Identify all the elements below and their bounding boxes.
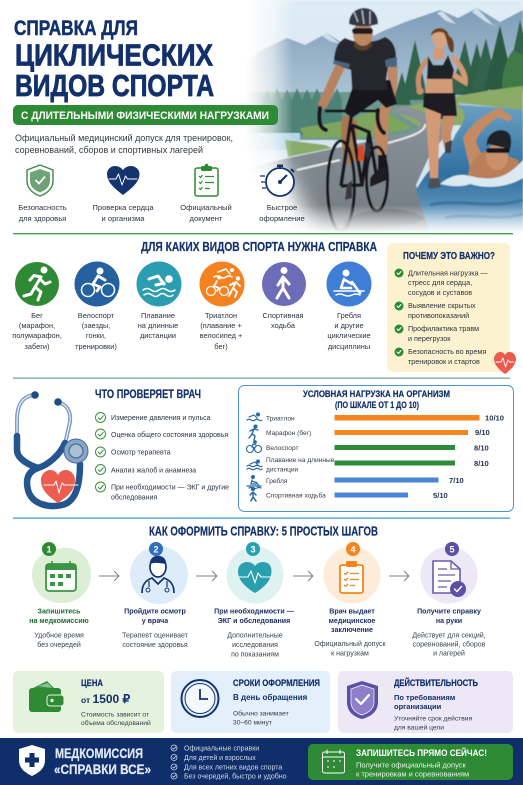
title: ЦИКЛИЧЕСКИХ	[15, 38, 213, 72]
step 4: conclusion: Врач выдает	[329, 608, 375, 616]
intro text: Официальный медицинский допуск для тренировок,	[15, 133, 233, 143]
step 4: conclusion: к нагрузкам	[331, 650, 369, 658]
step 3: ECG: При необходимости —	[214, 608, 295, 616]
step 4: conclusion: Официальный допуск	[314, 640, 387, 648]
sport: cycling: гонки,	[86, 331, 106, 340]
green subtitle banner	[13, 105, 278, 125]
step 3: ECG: по показаниям	[231, 652, 279, 658]
bar chart: conditional load: (ПО ШКАЛЕ ОТ 1 ДО 10)	[335, 400, 419, 410]
card: price: Стоимость зависит от	[81, 712, 149, 718]
step 1: sign up: 1	[46, 544, 52, 554]
panel: why it matters: Выявление скрытых	[408, 301, 476, 310]
bar chart: conditional load: УСЛОВНАЯ НАГРУЗКА НА ОРГАНИЗМ	[303, 389, 450, 400]
benefit: stopwatch: оформление	[259, 214, 305, 223]
benefit: safety: Безопасность	[18, 203, 67, 212]
card: validity: для вашей цели	[394, 724, 444, 732]
sport: rowing	[326, 262, 372, 351]
panel: why it matters: стресс для сердца,	[408, 278, 472, 287]
step 5: receive certificate: 5	[449, 544, 455, 554]
sport: rowing: Гребля	[337, 311, 361, 320]
sport: triathlon: Триатлон	[205, 311, 237, 320]
step 5: receive certificate: Действует для секций,	[412, 632, 486, 640]
sport: swimming: дистанции	[140, 331, 176, 340]
step 2: doctor: Пройдите осмотр	[124, 608, 187, 616]
sport: race walking: ходьба	[271, 321, 296, 330]
step 1: sign up	[29, 542, 91, 649]
left fade	[225, 0, 292, 181]
card: validity: По требованиям	[394, 693, 456, 702]
card: price: ЦЕНА	[81, 678, 103, 688]
panel: why it matters: ПОЧЕМУ ЭТО ВАЖНО?	[403, 251, 495, 262]
step 3: ECG: 3	[250, 544, 256, 554]
sport: triathlon: бег)	[214, 342, 228, 351]
green subtitle banner: С ДЛИТЕЛЬНЫМИ ФИЗИЧЕСКИМИ НАГРУЗКАМИ	[21, 110, 269, 122]
benefit: official document	[180, 164, 232, 223]
step 3: ECG	[214, 542, 295, 658]
card: price: объема обследований	[81, 719, 151, 727]
bar chart: conditional load: Триатлон	[266, 416, 295, 422]
benefit: stopwatch: Быстрое	[267, 203, 297, 212]
step 4: conclusion: 4	[350, 544, 356, 554]
doctor checklist: Измерение давления и пульса	[111, 415, 211, 422]
call to action: Получите официальный допуск	[356, 760, 467, 770]
grass	[395, 86, 523, 127]
sport: race walking: Спортивная	[262, 311, 304, 320]
hero photo: cyclist, runner and swimmer on a mountain road	[249, 0, 523, 232]
panel: why it matters: сосудов и суставов	[408, 288, 472, 297]
sport: cycling: тренировки)	[75, 342, 117, 351]
step 1: sign up: без очередей	[37, 641, 81, 649]
step 5: receive certificate: на руки	[436, 617, 462, 625]
benefit: heart check	[92, 166, 154, 223]
step 1: sign up: Удобное время	[34, 632, 84, 640]
sport: rowing: циклические	[327, 331, 371, 340]
step 3: ECG: исследования	[232, 642, 278, 649]
bar chart: conditional load: Велоспорт	[266, 445, 299, 452]
card: price	[13, 671, 164, 733]
step 5: receive certificate: соревнований, сборов	[413, 640, 486, 648]
sport: cycling: Велоспорт	[78, 311, 115, 320]
chart sport icons	[246, 413, 262, 501]
card: validity: Уточняйте срок действия	[394, 714, 473, 722]
card: processing time: СРОКИ ОФОРМЛЕНИЯ	[233, 678, 320, 689]
sport: triathlon: (плавание +	[200, 321, 242, 330]
doctor checklist: Анализ жалоб и анамнеза	[111, 466, 196, 474]
footer list	[171, 745, 287, 780]
bottom fade	[278, 206, 523, 233]
benefit: heart check: Проверка сердца	[92, 203, 154, 212]
step 2: doctor	[122, 542, 189, 649]
benefit: safety	[18, 165, 67, 223]
footer list: Без очередей, быстро и удобно	[184, 772, 287, 780]
card: validity	[338, 671, 513, 733]
doctor checklist: При необходимости — ЭКГ и другие	[111, 484, 229, 492]
step 2: doctor: состояние здоровья	[122, 642, 188, 649]
call to action	[308, 744, 513, 780]
sport: swimming: на длинные	[138, 321, 178, 330]
step 3: ECG: Дополнительные	[227, 632, 283, 640]
card: processing time: 30–60 минут	[233, 720, 272, 726]
intro text	[15, 133, 233, 155]
step 4: conclusion: заключение	[331, 626, 373, 634]
arrow	[99, 571, 119, 581]
sport: race walking	[262, 262, 306, 330]
bar chart: conditional load: 5/10	[433, 491, 448, 500]
panel: why it matters: Безопасность во время	[408, 347, 486, 356]
card: processing time	[171, 671, 330, 733]
bar chart: conditional load	[238, 386, 514, 512]
arrow	[196, 571, 217, 581]
runner	[416, 28, 465, 189]
step 2: doctor: у врача	[142, 617, 168, 625]
step 2: doctor: 2	[153, 544, 159, 554]
card: processing time: В день обращения	[233, 693, 308, 702]
water	[416, 105, 523, 233]
bar chart: conditional load: Плавание на длинные	[266, 457, 335, 464]
sport: cycling: (заезды,	[82, 321, 110, 330]
card: validity: ДЕЙСТВИТЕЛЬНОСТЬ	[394, 677, 478, 689]
footer list: Для всех летних видов спорта	[184, 764, 282, 772]
arrow	[389, 571, 409, 581]
title: ВИДОВ СПОРТА	[15, 68, 214, 103]
sport: running: забеги)	[24, 342, 50, 351]
panel: why it matters: противопоказаний	[408, 311, 469, 320]
sport: running	[12, 262, 62, 351]
sport: rowing: и другие	[334, 321, 364, 330]
panel: why it matters: тренировок и стартов	[408, 357, 480, 366]
cyclist	[319, 8, 425, 233]
bicycle	[319, 108, 388, 231]
swimmer	[440, 108, 523, 187]
footer band: МЕДКОМИССИЯ	[55, 746, 143, 761]
trees	[392, 20, 523, 105]
intro text: соревнований, сборов и спортивных лагерей	[15, 145, 203, 155]
step 4: conclusion	[314, 542, 387, 658]
sport: cycling	[74, 262, 120, 351]
sport: swimming	[136, 262, 182, 340]
step 5: receive certificate: и лагерей	[433, 650, 465, 658]
benefit: official document: Официальный	[180, 203, 232, 212]
sport: triathlon: велосипед +	[200, 331, 242, 340]
bar chart: conditional load: 7/10	[449, 476, 464, 485]
doctor checklist: Осмотр терапевта	[111, 450, 171, 456]
step 5: receive certificate	[412, 542, 486, 658]
panel: why it matters	[387, 243, 516, 374]
step 2: doctor: Терапевт оценивает	[122, 632, 189, 640]
heading: steps: КАК ОФОРМИТЬ СПРАВКУ: 5 ПРОСТЫХ ШАГОВ	[149, 524, 378, 538]
bar chart: conditional load: 10/10	[485, 414, 504, 422]
benefit: safety: для здоровья	[19, 214, 66, 223]
title	[14, 17, 214, 103]
lake	[252, 132, 301, 150]
card: processing time: Обычно занимает	[233, 710, 289, 718]
title: СПРАВКА ДЛЯ	[14, 17, 138, 40]
arrow	[293, 571, 313, 581]
sport: swimming: Плавание	[141, 311, 175, 320]
call to action: ЗАПИШИТЕСЬ ПРЯМО СЕЙЧАС!	[356, 747, 487, 759]
road	[262, 106, 443, 230]
step 5: receive certificate: Получите справку	[417, 608, 481, 616]
sport: running: Бег	[31, 311, 43, 320]
card: price: от 1500 ₽	[81, 692, 131, 706]
step 4: conclusion: медицинское	[329, 617, 375, 625]
heading: what the doctor checks: ЧТО ПРОВЕРЯЕТ ВРАЧ	[95, 387, 201, 401]
step 3: ECG: ЭКГ и обследования	[218, 617, 290, 625]
benefit: stopwatch	[259, 164, 305, 223]
step 1: sign up: Запишитесь	[38, 608, 81, 616]
panel: why it matters: Длительная нагрузка —	[408, 268, 489, 278]
forest left	[240, 92, 430, 140]
heading: sports: ДЛЯ КАКИХ ВИДОВ СПОРТА НУЖНА СПРАВКА	[141, 239, 377, 254]
doctor checklist: обследования	[111, 494, 157, 502]
doctor checklist	[96, 412, 229, 502]
bar chart: conditional load: 8/10	[474, 444, 489, 452]
footer band: «СПРАВКИ ВСЕ»	[54, 762, 151, 777]
panel: why it matters: и перегрузок	[408, 334, 451, 343]
bar chart: conditional load: Гребля	[266, 477, 288, 485]
bar chart: conditional load: дистанции	[266, 466, 299, 474]
benefit: heart check: и организма	[102, 214, 145, 223]
icon: shield with cross	[19, 745, 45, 776]
bar chart: conditional load: 8/10	[474, 459, 489, 468]
footer list: Официальные справки	[184, 746, 259, 752]
sport: rowing: дисциплины	[328, 342, 370, 351]
footer band	[0, 738, 523, 785]
bar chart: conditional load: Марафон (бег)	[266, 429, 311, 437]
bar chart: conditional load: 9/10	[475, 428, 490, 437]
benefit: official document: документ	[190, 214, 223, 223]
panel: why it matters: Профилактика травм	[408, 324, 479, 333]
bar chart: conditional load: Спортивная ходьба	[266, 492, 326, 500]
card: validity: организации	[394, 702, 442, 711]
doctor checklist: Оценка общего состояния здоровья	[111, 431, 228, 439]
icon: stethoscope with heart	[17, 391, 88, 506]
call to action: к тренировкам и соревнованиям	[356, 770, 469, 778]
step 1: sign up: на медкомиссию	[29, 617, 89, 625]
sport: running: (марафон,	[19, 321, 55, 330]
sport: triathlon	[200, 262, 244, 351]
sport: running: полумарафон,	[12, 331, 62, 340]
footer list: Для детей и взрослых	[184, 754, 256, 762]
